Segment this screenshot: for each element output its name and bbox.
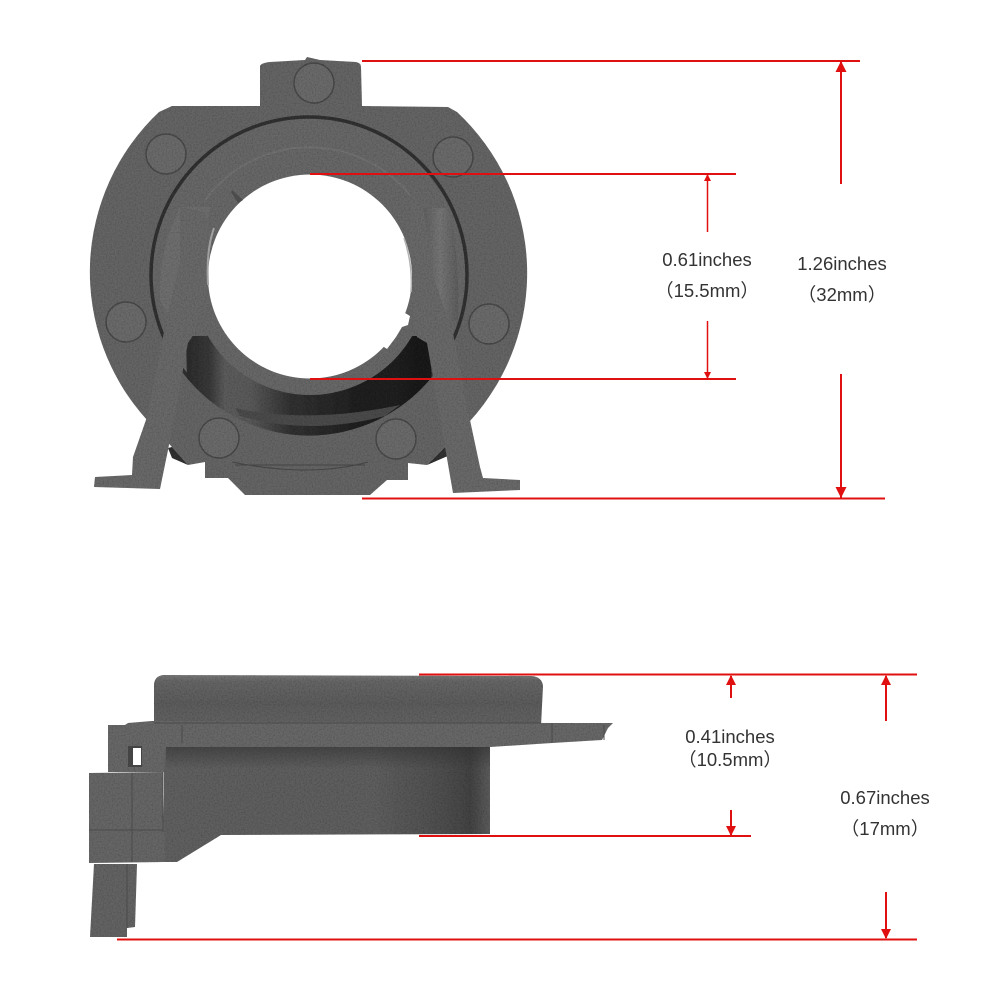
inner arrow heads: [704, 174, 711, 379]
dot mid left: [106, 302, 146, 342]
label 15.5mm: （15.5mm）: [655, 280, 759, 301]
label 10.5mm: （10.5mm）: [678, 749, 782, 770]
hole right inner edge: [404, 238, 411, 292]
left clip arm: [94, 207, 212, 489]
large arrow up: [885, 676, 887, 721]
label 1.26 inches: 1.26inches: [797, 253, 887, 274]
label 32mm: （32mm）: [798, 284, 886, 305]
bottom leg: [90, 864, 137, 937]
front view: adapter ring: [90, 57, 527, 495]
label 0.41 inches: 0.41inches: [685, 726, 775, 747]
centre hole: [208, 174, 412, 378]
top cylinder: [154, 675, 543, 726]
window: [133, 748, 141, 765]
hole notch lower right: [375, 310, 410, 349]
side view: adapter profile: [89, 675, 613, 937]
side extension lines: [117, 674, 917, 940]
right window light: [422, 208, 458, 325]
label 0.67 inches: 0.67inches: [840, 787, 930, 808]
lower cylinder: [164, 745, 490, 862]
textured side parts: [89, 675, 613, 937]
flange ledge line: [154, 723, 604, 743]
window frame: [128, 746, 142, 767]
outer arrow top: [840, 61, 842, 184]
small arrow up: [730, 676, 732, 698]
inner arrow top: [706, 174, 708, 232]
dot mid right: [469, 304, 509, 344]
arrow heads: [726, 675, 891, 939]
outer arrow heads: [836, 61, 846, 498]
label 17mm: （17mm）: [841, 818, 929, 839]
hole left inner edge: [208, 228, 214, 285]
dot top: [294, 63, 334, 103]
upper ledge arc: [205, 147, 410, 200]
right plate shadow: [427, 447, 450, 465]
band around hole: [192, 159, 428, 395]
inner recess disc: [151, 117, 467, 433]
left plate shadow: [168, 447, 188, 465]
large arrow down: [885, 892, 887, 938]
dot upper left: [146, 134, 186, 174]
raised dots: [106, 63, 509, 459]
left block: [89, 772, 165, 863]
dot lower left: [199, 418, 239, 458]
right clip arm: [405, 195, 520, 493]
inner arrow bottom: [706, 321, 708, 379]
shadow under flange: [166, 747, 490, 769]
flange: [108, 721, 613, 772]
lower plate seam: [232, 462, 368, 470]
hole tooth upper left: [231, 190, 243, 203]
label 0.61 inches: 0.61inches: [662, 249, 752, 270]
dot lower right: [376, 419, 416, 459]
left window light: [160, 207, 210, 320]
small arrow down: [730, 810, 732, 835]
dot upper right: [433, 137, 473, 177]
outer height lines: [362, 61, 885, 498]
lower crescent lighter strip: [235, 405, 400, 426]
ring body with top tab and lower plate: [90, 57, 527, 495]
front view dimensions: [310, 61, 887, 498]
outer arrow bottom: [840, 374, 842, 498]
dark crescent under the band: [186, 336, 434, 436]
side view dimensions: [117, 674, 930, 940]
inner diameter lines: [310, 174, 736, 379]
textured ring parts: [90, 57, 527, 495]
left block seams: [89, 772, 163, 928]
